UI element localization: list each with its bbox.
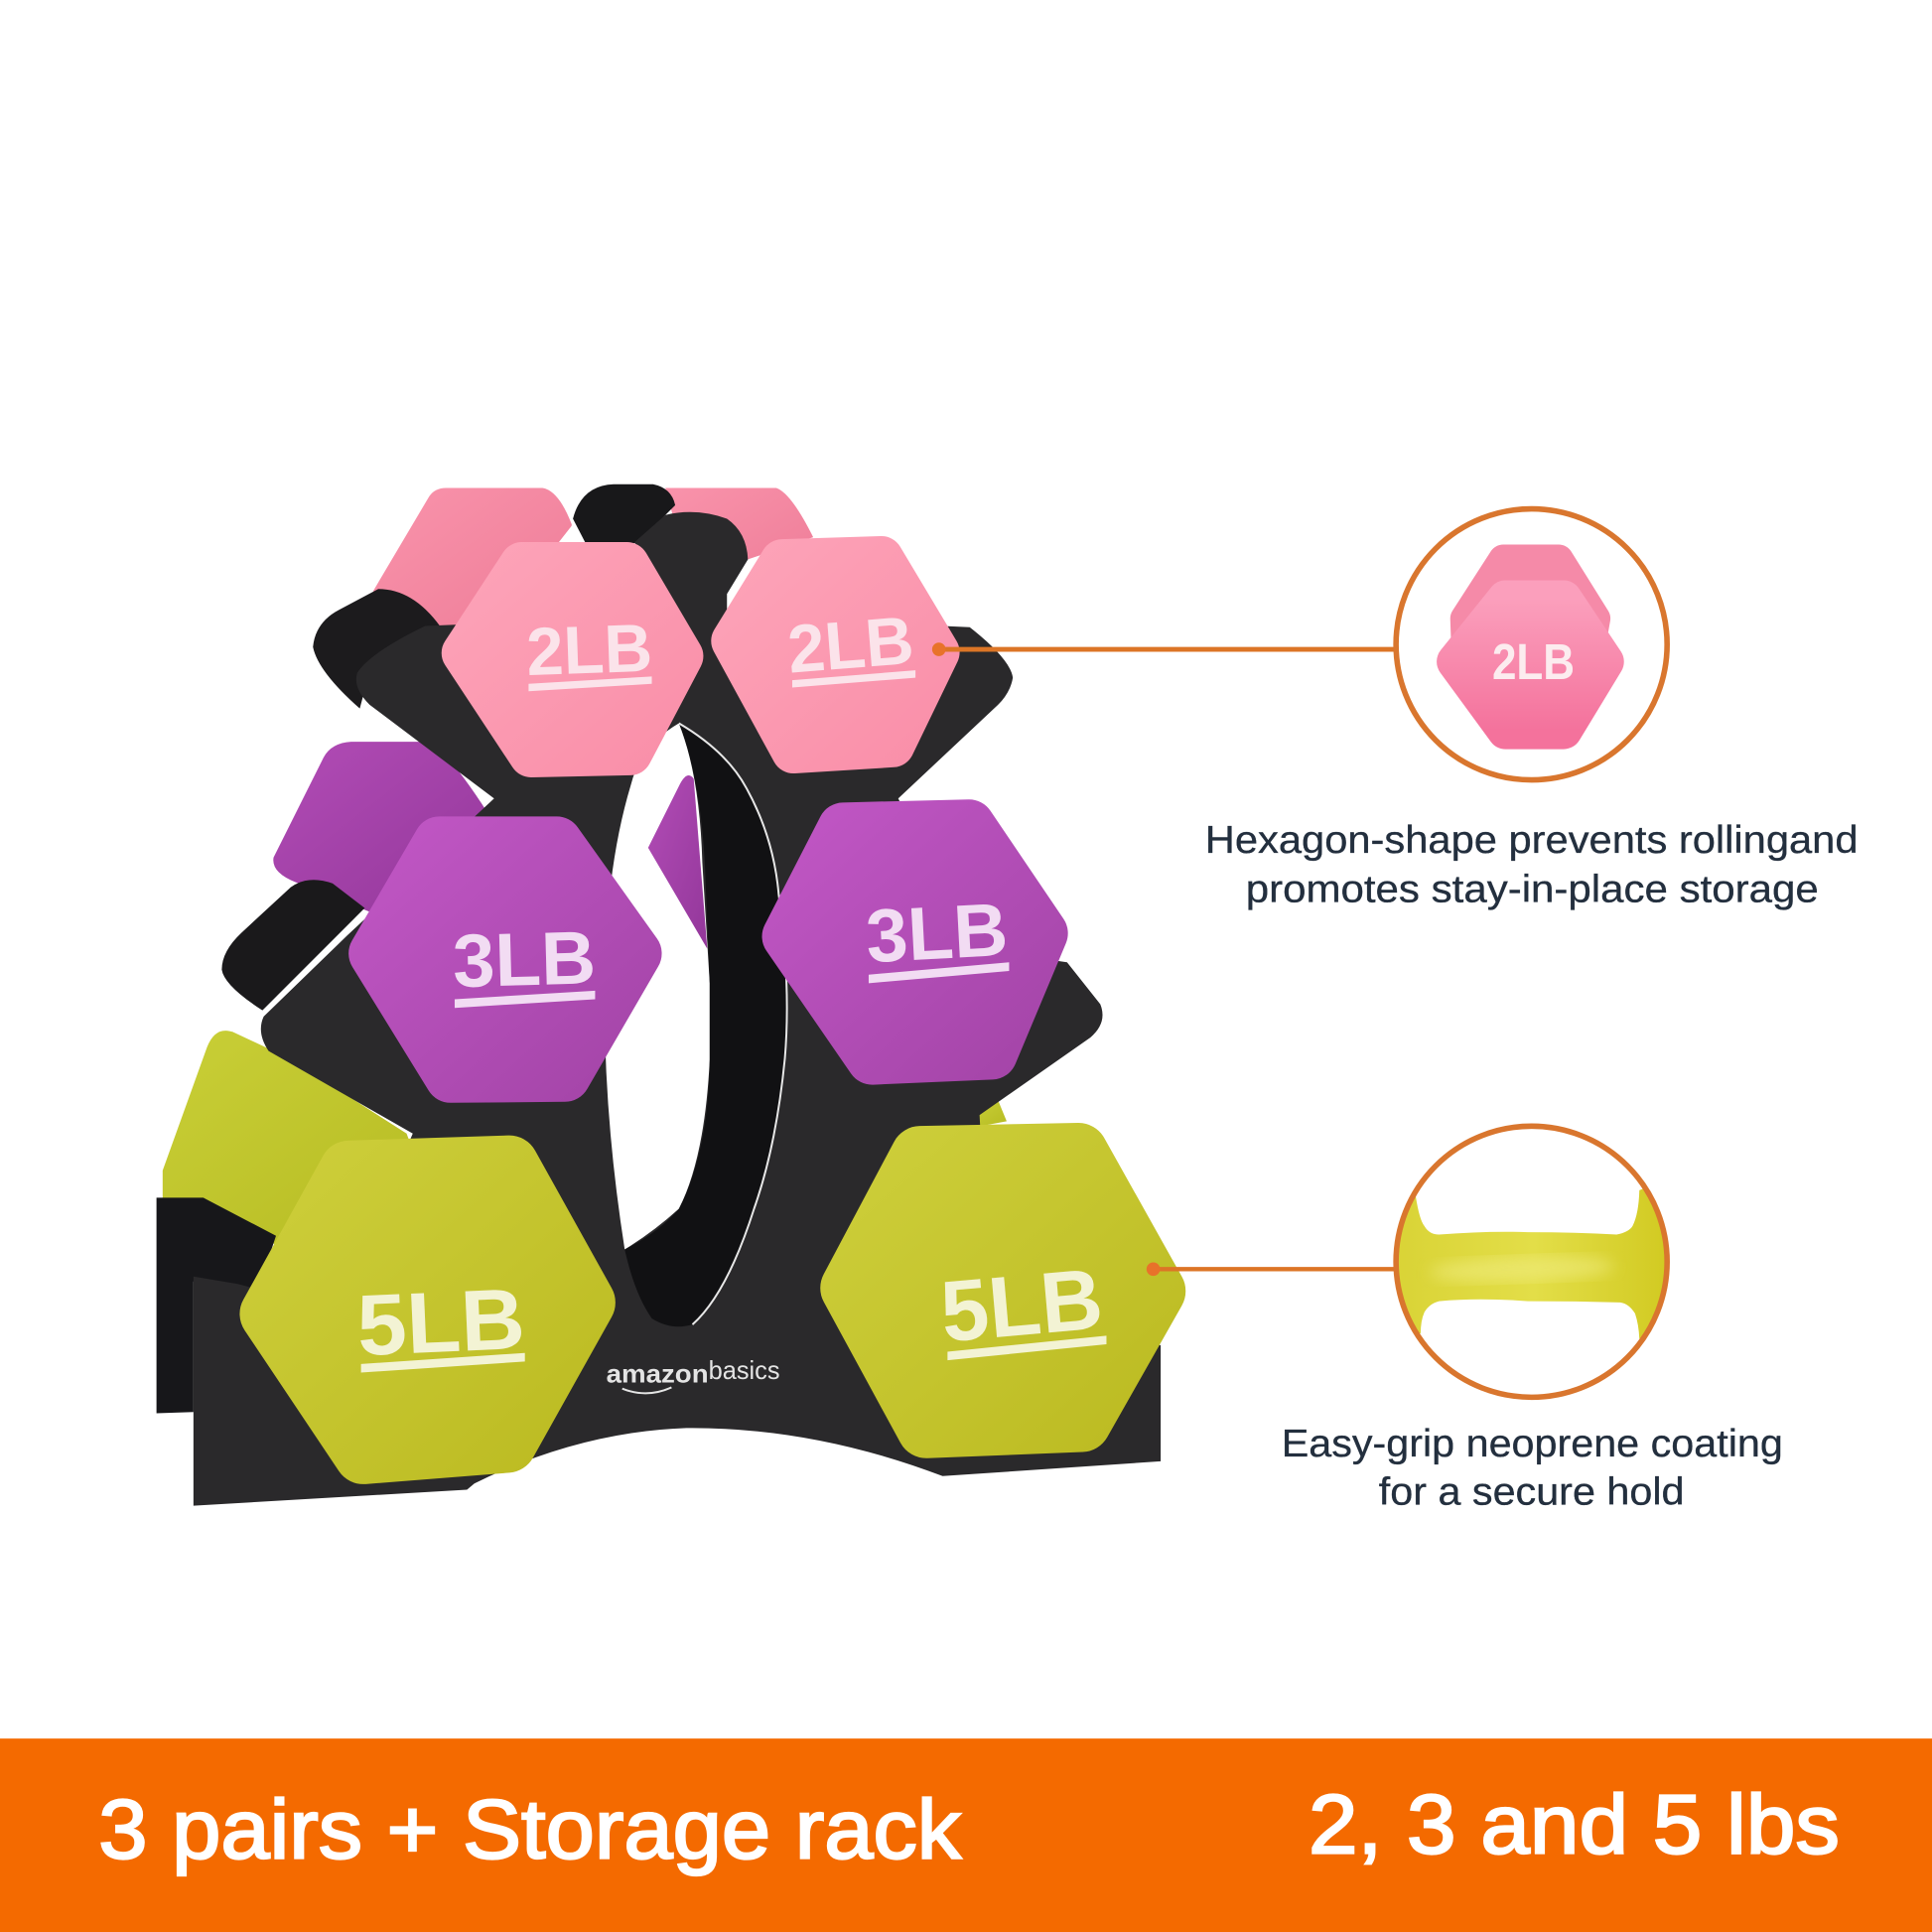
caption: neoprene coating: [1282, 1423, 1783, 1513]
3LB dumbbell right: [787, 825, 1042, 1059]
brand logo: amazon: [607, 1358, 709, 1388]
5LB dumbbell right: 5LB: [937, 1251, 1106, 1360]
2LB dumbbell left: 2LB: [525, 611, 653, 690]
banner text: weights: 2, 3 and 5 lbs: [1309, 1778, 1840, 1871]
rack front plate: [194, 512, 1161, 1506]
ring inner surface: [624, 724, 787, 1326]
brand logo: basics: [709, 1355, 780, 1385]
3LB dumbbell left: 3LB: [452, 915, 597, 1004]
caption: neoprene coating: Easy-grip neoprene coating: [1282, 1423, 1783, 1465]
mini dumbbell back head: [1465, 559, 1595, 653]
ring opening: [605, 724, 710, 1249]
2LB dumbbell right: [733, 558, 937, 752]
back purple dumbbell left: [273, 742, 492, 911]
caption: neoprene coating: for a secure hold: [1379, 1470, 1685, 1513]
callout: hexagon detail circle: [1396, 509, 1667, 780]
callout: connector to grip detail: [1147, 1262, 1396, 1276]
caption: hexagon shape: promotes stay-in-place storage: [1246, 868, 1819, 910]
callout: connector to hexagon detail: [932, 642, 1396, 656]
back yellow dumbbell left: [163, 1031, 444, 1244]
rack rear prong left middle: [221, 880, 364, 1011]
callout: grip detail circle: [1380, 1126, 1688, 1397]
5LB dumbbell right: [850, 1153, 1157, 1429]
caption: hexagon shape: Hexagon-shape prevents rollingand: [1205, 819, 1859, 862]
back pink dumbbell left: [376, 490, 569, 628]
grip handle: [1398, 1189, 1664, 1338]
5LB dumbbell left: 5LB: [355, 1271, 527, 1374]
3LB dumbbell right: 3LB: [864, 888, 1010, 979]
5LB dumbbell left: [269, 1165, 586, 1454]
3LB dumbbell left: [374, 842, 636, 1077]
purple dumbbell seen through ring: [648, 775, 707, 949]
yellow back tip right: [973, 1100, 1007, 1128]
mini dumbbell front head: [1455, 599, 1605, 731]
product: dumbbell rack with six dumbbells: [157, 484, 1161, 1506]
2LB dumbbell left: [464, 564, 681, 756]
banner text: contents: 3 pairs + Storage rack: [98, 1783, 962, 1876]
rack rear prong left top: [313, 589, 440, 709]
banner: [0, 1738, 1932, 1932]
brand logo: [607, 1355, 780, 1393]
caption: hexagon shape: [1205, 819, 1859, 910]
back pink dumbbell right: [665, 487, 813, 579]
rack rear prong top: [573, 484, 675, 554]
rack rear foot: [157, 1197, 276, 1414]
2LB dumbbell right: 2LB: [785, 603, 916, 688]
ring highlight edge: [679, 724, 787, 1324]
mini dumbbell weight label: 2LB: [1492, 633, 1575, 690]
